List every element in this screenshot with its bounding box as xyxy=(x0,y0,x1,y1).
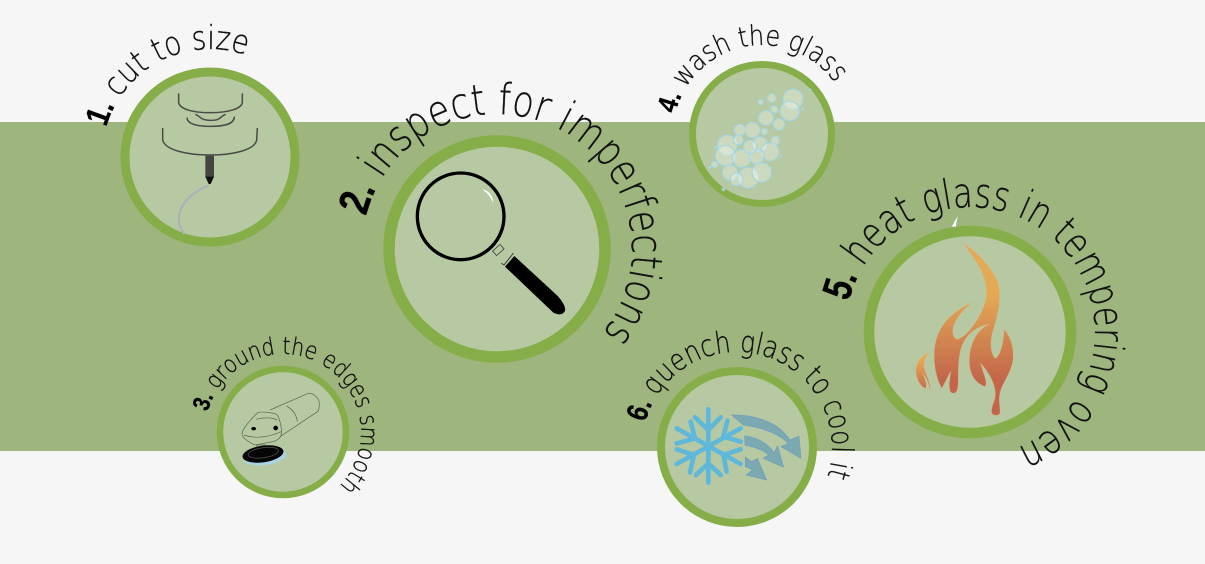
accent sliver xyxy=(952,216,958,227)
badge 2 xyxy=(389,141,605,357)
badge 6 xyxy=(661,371,813,523)
icon: soap bubbles xyxy=(709,89,811,191)
label 3: 3. ground the edges smooth xyxy=(193,336,375,492)
label 4: 4. wash the glass xyxy=(658,24,846,113)
badge 1 xyxy=(125,72,295,242)
icon: cutting head xyxy=(163,93,257,234)
badge 5 xyxy=(869,231,1071,433)
step 4: wash the glass xyxy=(658,24,846,207)
badge 4 xyxy=(692,64,832,204)
icon: snowflake and cold arrows xyxy=(677,409,801,483)
icon: flame xyxy=(916,243,1013,415)
background band xyxy=(0,122,1205,451)
label 6: 6. quench glass to cool it xyxy=(627,330,855,480)
label 1: 1. cut to size xyxy=(86,24,248,126)
step 1: cut to size xyxy=(86,24,300,246)
label 2: 2. inspect for imperfections xyxy=(339,82,662,344)
step 6: quench glass to cool it xyxy=(627,330,855,527)
label 5: 5. heat glass in tempering oven xyxy=(822,178,1126,466)
step 2: inspect for imperfections xyxy=(339,82,662,363)
icon: angle grinder xyxy=(241,393,319,468)
step 5: heat glass in tempering oven xyxy=(822,178,1126,466)
icon: magnifying glass xyxy=(417,173,565,314)
badge 3 xyxy=(220,369,346,495)
step 3: ground the edges smooth xyxy=(193,336,375,498)
